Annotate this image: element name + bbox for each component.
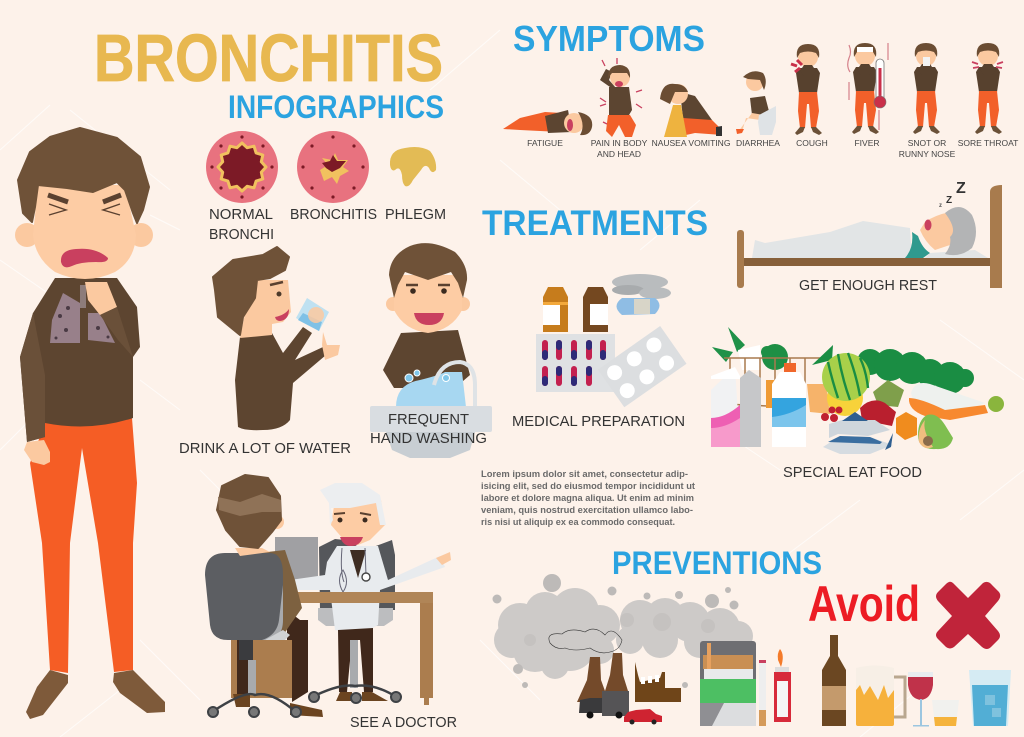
- heading: preventions: PREVENTIONS: [612, 545, 822, 581]
- label: frequent hand washing: [370, 411, 487, 447]
- figure: sick man: [15, 128, 165, 719]
- symptom: fatigue: FATIGUE: [527, 138, 563, 148]
- symptom: cough: COUGH: [796, 138, 828, 148]
- label: see a doctor: SEE A DOCTOR: [350, 714, 457, 731]
- symptom: diarrhea: DIARRHEA: [736, 138, 780, 148]
- symptom: nausea vomiting: [652, 84, 730, 148]
- label: special eat food: SPECIAL EAT FOOD: [783, 464, 922, 481]
- icon: normal bronchi: [206, 131, 278, 203]
- symptom: sore throat: SORE THROAT: [958, 138, 1018, 148]
- icon: bed with sleeping person: z: [939, 203, 942, 209]
- label: frequent hand washing: HAND WASHING: [370, 430, 487, 447]
- icon: factories: [577, 653, 681, 702]
- symptom: fever: [848, 43, 888, 148]
- text block: lorem ipsum: [481, 469, 695, 527]
- symptom: fatigue: [503, 110, 592, 148]
- smoke cloud: [492, 574, 753, 688]
- text block: lorem ipsum: isicing elit, sed do eiusmod tempor incididunt ut: [481, 481, 695, 491]
- title: BRONCHITIS: BRONCHITIS: [94, 21, 443, 96]
- icon: bronchitis: [297, 131, 369, 203]
- lungs: [50, 285, 115, 343]
- symptom: cough: [791, 44, 828, 148]
- subtitle: INFOGRAPHICS: INFOGRAPHICS: [228, 89, 444, 125]
- icon: healthy food: [711, 327, 1004, 454]
- symptom: snot or runny nose: RUNNY NOSE: [899, 149, 956, 159]
- symptom: nausea vomiting: NAUSEA VOMITING: [652, 138, 730, 148]
- label: bronchitis: BRONCHITIS: [290, 206, 377, 223]
- icon: water glass: [969, 670, 1011, 726]
- text block: lorem ipsum: ris nisi ut aliquip ex ea commodo consequat.: [481, 517, 675, 527]
- symptom: sore throat: [958, 43, 1018, 148]
- icon: lighter: [774, 649, 791, 722]
- label: drink a lot of water: DRINK A LOT OF WATER: [179, 440, 351, 457]
- label: medical preparation: MEDICAL PREPARATION: [512, 413, 685, 430]
- icon: bed with sleeping person: Z: [946, 195, 952, 206]
- label: normal bronchi: NORMAL: [209, 206, 273, 223]
- heading: avoid: Avoid: [808, 576, 920, 632]
- icon: wine glass: [908, 672, 933, 726]
- heading: treatments: TREATMENTS: [482, 204, 708, 243]
- icon: cigarette pack: [700, 641, 756, 726]
- icon: red cross: [936, 582, 1000, 649]
- label: frequent hand washing: FREQUENT: [388, 411, 469, 428]
- symptom: snot or runny nose: SNOT OR: [908, 138, 946, 148]
- text block: lorem ipsum: veniam, quis nostrud exercitation ullamco labo-: [481, 505, 693, 515]
- label: get enough rest: GET ENOUGH REST: [799, 277, 937, 294]
- symptom: pain in body and head: PAIN IN BODY: [591, 138, 648, 148]
- symptom: snot or runny nose: [899, 43, 956, 159]
- icon: beer mug: [856, 666, 905, 726]
- icon: bed with sleeping person: Z: [956, 180, 966, 197]
- icon: phlegm: [390, 147, 436, 186]
- heading: symptoms: SYMPTOMS: [513, 18, 705, 59]
- icon: truck and car: [579, 691, 662, 724]
- icon: bed with sleeping person: [737, 180, 1002, 288]
- scene: see a doctor: [205, 475, 451, 717]
- label: phlegm: PHLEGM: [385, 206, 446, 223]
- text block: lorem ipsum: Lorem ipsum dolor sit amet, consectetur adip-: [481, 469, 688, 479]
- text block: lorem ipsum: labore et dolore magna aliqua. Ut enim ad minim: [481, 493, 694, 503]
- symptom: pain in body and head: AND HEAD: [597, 149, 641, 159]
- symptom: diarrhea: [736, 71, 780, 148]
- icon: cigarette: [759, 660, 766, 726]
- icon: medicines: [536, 274, 687, 407]
- figure: man drinking water: [213, 247, 340, 430]
- icon: bottle: [822, 635, 846, 726]
- figure: man washing hands: [370, 243, 492, 458]
- label: bronchi: BRONCHI: [209, 226, 274, 243]
- symptom: fever: FIVER: [854, 138, 880, 148]
- icon: shot glass: [932, 700, 959, 726]
- symptom: pain in body and head: [591, 58, 648, 159]
